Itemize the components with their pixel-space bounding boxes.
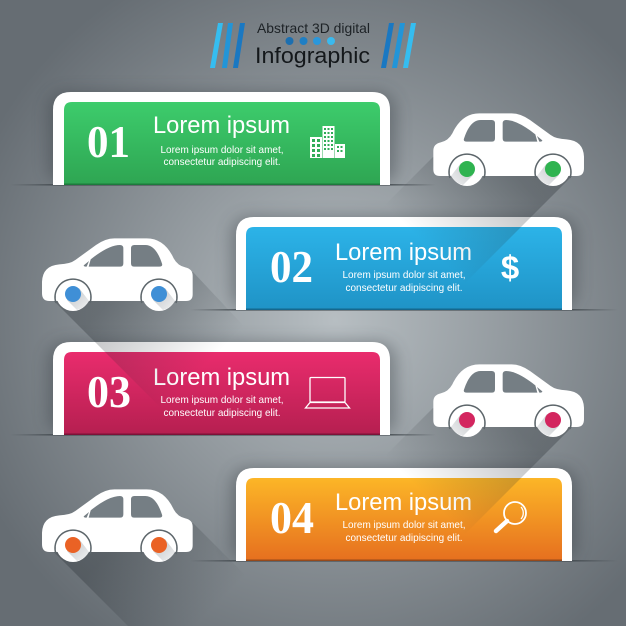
car 1 hubs <box>459 161 561 177</box>
panel 2 text <box>342 269 466 294</box>
title: left slanted bars <box>210 23 245 68</box>
icon: dollar: $ <box>501 249 519 286</box>
panel 1 text: Lorem ipsum dolor sit amet, <box>160 144 284 156</box>
panel 3 text <box>160 394 284 419</box>
icon: laptop <box>306 378 350 408</box>
panel 1 white frame <box>53 92 390 185</box>
panel 3 number: 03 <box>87 366 131 417</box>
car 2 hubs <box>65 286 167 302</box>
title: dots <box>286 37 335 45</box>
panel 3 heading: Lorem ipsum <box>153 364 290 391</box>
panel 3: crimson <box>10 342 436 436</box>
icon: buildings <box>310 126 345 158</box>
panel 3 text: consectetur adipiscing elit. <box>164 407 280 419</box>
panel 1 heading: Lorem ipsum <box>153 112 290 139</box>
panel 2 text: consectetur adipiscing elit. <box>346 282 462 294</box>
panel 4 white frame <box>236 468 572 561</box>
panel 4 text: Lorem ipsum dolor sit amet, <box>342 519 466 531</box>
car 3 hubs <box>459 412 561 428</box>
panel 3 coloured face <box>64 352 380 435</box>
panel 4 heading: Lorem ipsum <box>335 489 472 516</box>
panel 1: green <box>10 92 436 186</box>
panel 1 backing shadow <box>48 92 396 185</box>
title: right slanted bars <box>381 23 416 68</box>
car 1 <box>433 113 584 186</box>
car 4 hubs <box>65 537 167 553</box>
panel 1 text <box>160 144 284 168</box>
panel 4 text: consectetur adipiscing elit. <box>346 532 462 544</box>
car 2 long shadow <box>43 272 350 453</box>
car 3 long shadow <box>276 408 583 579</box>
panel 2 backing shadow <box>231 217 577 310</box>
panel 2 text: Lorem ipsum dolor sit amet, <box>342 269 466 281</box>
panel 1 slot line <box>10 184 436 186</box>
panel 4: orange <box>190 468 618 562</box>
panel 3 slot line <box>10 434 436 436</box>
panel 4 coloured face <box>246 478 562 561</box>
panel 2 heading: Lorem ipsum <box>335 239 472 266</box>
title: small heading: Abstract 3D digital <box>257 20 370 36</box>
car 4 long shadow <box>43 523 296 626</box>
panel 2: blue <box>190 217 618 311</box>
car 3 <box>433 364 584 437</box>
panel 4 number: 04 <box>270 492 314 543</box>
panel 2 white frame <box>236 217 572 310</box>
panel 4 text <box>342 519 466 544</box>
car 4 <box>42 489 193 562</box>
panel 4 slot line <box>190 560 618 562</box>
panel 4 backing shadow <box>231 468 577 561</box>
panel 2 coloured face <box>246 227 562 310</box>
icon: magnifier <box>496 502 526 531</box>
panel 1 coloured face <box>64 102 380 185</box>
title block <box>210 20 416 68</box>
panel 2 slot line <box>190 309 618 311</box>
panel 3 text: Lorem ipsum dolor sit amet, <box>160 394 284 406</box>
title: main heading: Infographic <box>255 43 370 68</box>
panel 1 text: consectetur adipiscing elit. <box>164 156 280 168</box>
car 1 long shadow <box>276 157 583 328</box>
panel 3 white frame <box>53 342 390 435</box>
panel 1 number: 01 <box>87 116 130 167</box>
car 2 <box>42 238 193 311</box>
panel 3 backing shadow <box>48 342 396 435</box>
panel 2 number: 02 <box>270 241 313 292</box>
